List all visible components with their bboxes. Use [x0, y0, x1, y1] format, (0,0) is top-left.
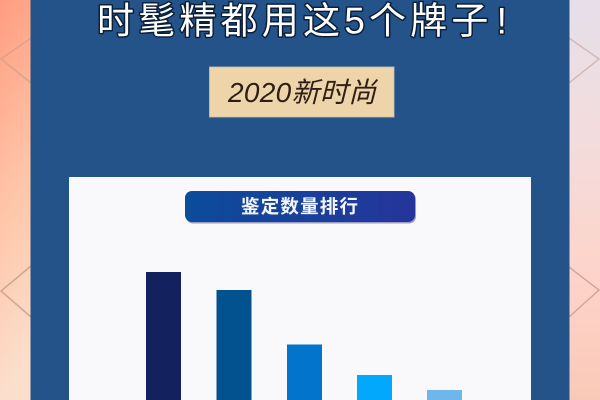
bar 2 — [216, 290, 252, 400]
icon: right lower chevron — [569, 267, 599, 317]
bar 4 — [357, 375, 392, 400]
card background — [69, 177, 531, 400]
badge text: 2020新时尚 — [227, 77, 379, 108]
title: 时髦精都用这5个牌子! — [97, 0, 511, 42]
icon: right upper chevron — [569, 38, 599, 83]
background: left gradient strip — [0, 0, 31, 400]
pill background — [185, 191, 415, 222]
icon: left lower chevron — [1, 266, 31, 317]
bar 3 — [287, 344, 322, 400]
chart heading pill — [185, 191, 416, 224]
background: right gradient strip — [569, 0, 600, 400]
icon: left upper chevron — [1, 38, 31, 83]
panel: chart card — [69, 177, 531, 400]
pill shadow — [186, 192, 416, 224]
pill text: 鉴定数量排行 — [241, 196, 359, 217]
badge background — [210, 67, 394, 117]
bar 1 — [146, 272, 181, 400]
bar 5 — [427, 390, 462, 400]
bar chart — [146, 272, 462, 400]
subtitle badge — [210, 67, 394, 117]
